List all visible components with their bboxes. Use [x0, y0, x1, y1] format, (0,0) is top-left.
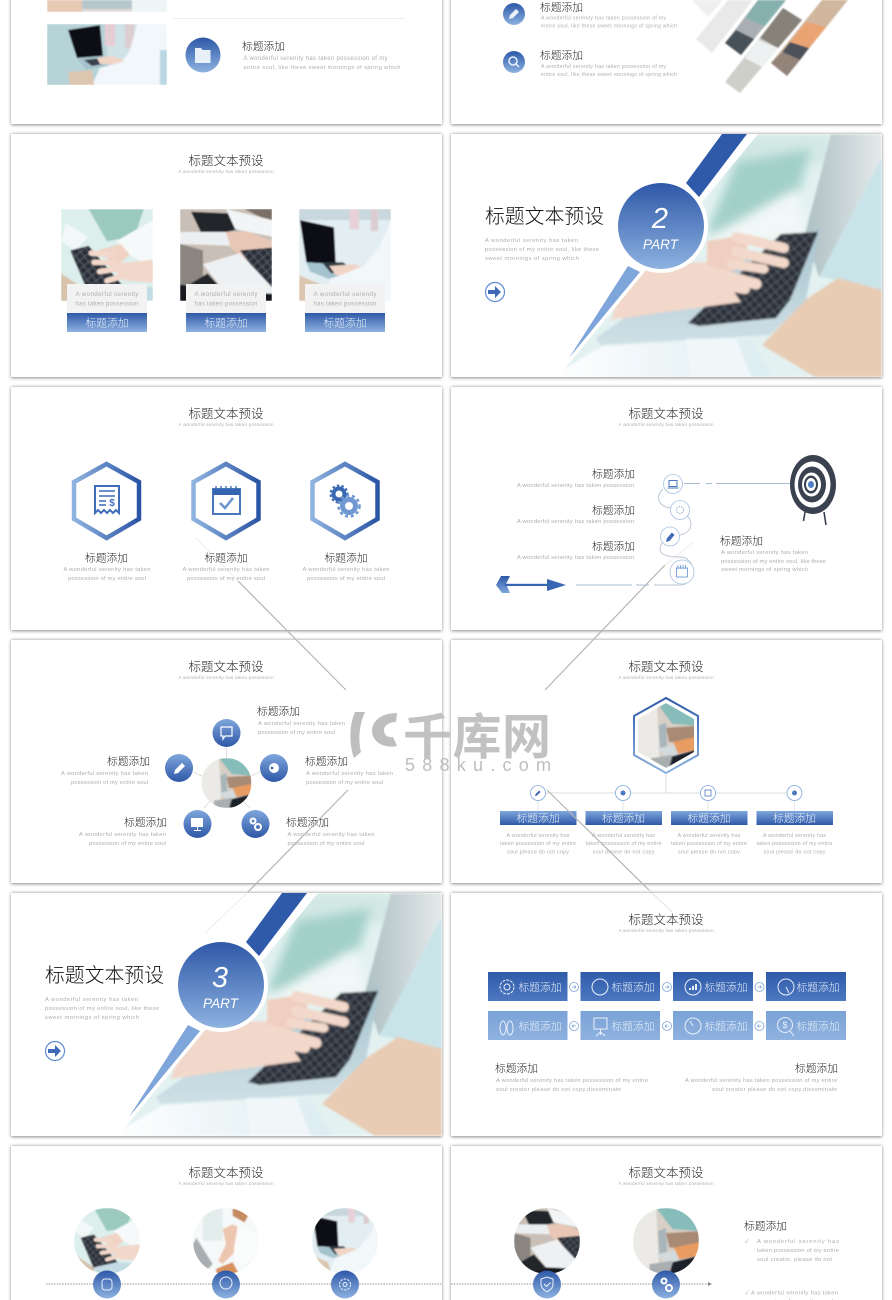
text block: A wonderful serenity has taken [45, 997, 138, 1003]
process row 2: 标题添加 [612, 1020, 654, 1033]
text block: sweet mornings of spring which [721, 567, 808, 573]
text block: possession of my entire soul [307, 576, 385, 582]
text block [45, 997, 159, 1021]
text block: soul creator please do not copy,disseminate [496, 1087, 621, 1093]
text block: A wonderful serenity has taken possession of my [541, 64, 666, 70]
process row 2: 标题添加 [704, 1020, 748, 1033]
text block: A wonderful serenity has taken [306, 771, 393, 777]
text block: A wonderful serenity has taken [288, 832, 374, 838]
text block: A wonderful serenity has taken [64, 567, 150, 573]
text block [302, 552, 390, 582]
text block: possession of my entire soul [68, 576, 146, 582]
icon: chat [212, 719, 240, 747]
watermark diagonal lines [196, 538, 694, 933]
heading: A wonderful serenity has taken possession [178, 169, 274, 174]
heading [618, 660, 714, 680]
text block: possession of my entire soul [89, 841, 166, 847]
panel: top-right slide [451, 0, 882, 124]
stripe: dark blue [246, 893, 307, 956]
badge: 2 PART: 2 [651, 203, 668, 235]
icon node 1 [93, 1270, 121, 1298]
text block: A wonderful serenity has taken [61, 771, 148, 777]
icon: gear node [670, 500, 690, 520]
column 1: 标题添加 [516, 812, 560, 825]
heading: 标题文本预设 [628, 407, 704, 421]
icon: magnifier [503, 51, 525, 73]
card 1: A wonderful serenity [76, 291, 139, 298]
text block: A wonderful serenity has taken possession of my [541, 16, 666, 22]
card 2: 标题添加 [204, 316, 248, 330]
text block: A wonderful serenity has taken [258, 721, 345, 727]
column 2: A wonderful serenity has [592, 833, 655, 839]
text block: entire soul, like these sweet mornings of spring which [541, 72, 677, 78]
icon: pencil [503, 3, 525, 25]
text block [182, 552, 270, 582]
icon node 2 [212, 1270, 240, 1298]
hexagon photo [634, 698, 698, 773]
column 4: taken possession of my entire [756, 841, 832, 847]
photo: laptop with black screen [47, 24, 167, 85]
panel: section 2 cover [451, 134, 882, 377]
text block: A wonderful serenity has taken possession [517, 483, 634, 489]
text block: sweet mornings of spring which [485, 256, 579, 262]
column 4: soul please do not copy [764, 850, 826, 856]
column 4: A wonderful serenity has [763, 833, 826, 839]
text block: 标题添加 [257, 705, 300, 718]
text block: 标题添加 [305, 755, 348, 768]
icon: book node [670, 560, 694, 584]
heading [618, 407, 714, 427]
photo: hands on laptop [11, 893, 442, 1136]
icon: pencil [165, 754, 193, 782]
text block: A wonderful serenity has taken possession [517, 519, 634, 525]
text block: A wonderful serenity has taken possession of my entire [685, 1078, 837, 1084]
text block: 标题添加 [242, 40, 285, 53]
text block: 标题添加 [324, 552, 368, 564]
heading [178, 407, 274, 427]
process row 2 [488, 1011, 846, 1040]
text block: A wonderful serenity has taken [721, 550, 808, 556]
text block: possession of my entire soul [258, 730, 335, 736]
text block [485, 238, 599, 262]
card 2: A wonderful serenity [194, 291, 258, 298]
text block [540, 49, 677, 78]
heading [178, 1166, 274, 1186]
text block: A wonderful serenity has [757, 1239, 839, 1245]
heading: A wonderful serenity has taken possession [618, 675, 714, 680]
text block [242, 40, 400, 71]
process row 2: 标题添加 [518, 1020, 562, 1033]
text block [79, 816, 167, 847]
panel: section 3 cover [11, 893, 442, 1136]
heading: 标题文本预设 [45, 965, 164, 987]
heading: 标题文本预设 [188, 154, 264, 168]
panel: timeline left [11, 1146, 442, 1300]
text block: taken possession of my entire [757, 1248, 839, 1254]
card 1: 标题添加 [86, 316, 128, 330]
card 2 [180, 209, 272, 332]
text block: soul creator, please do not [757, 1257, 832, 1263]
panel: arrow to target [451, 387, 882, 630]
text block: A wonderful serenity has taken possession of my entire [496, 1078, 648, 1084]
column 3: soul please do not copy [678, 850, 740, 856]
text block [540, 1, 677, 30]
panel: timeline right [451, 1146, 882, 1300]
icon: calendar hexagon [194, 464, 258, 538]
text block: 标题添加 [592, 504, 635, 517]
card 3: has taken possession [314, 300, 377, 308]
heading: 标题文本预设 [485, 206, 604, 228]
photo circle 4 [514, 1208, 580, 1274]
text block [495, 1062, 648, 1093]
card 3: A wonderful serenity [314, 291, 377, 298]
column 3: taken possession of my entire [671, 841, 747, 847]
icon: pencil node [660, 527, 680, 546]
badge: 2 PART [614, 179, 708, 273]
photo circle 3 [312, 1208, 378, 1274]
text block: 标题添加 [85, 552, 128, 564]
photo circle 2 [193, 1208, 259, 1274]
card 3 [299, 209, 391, 332]
heading: A wonderful serenity has taken possession [618, 422, 714, 427]
column 3: A wonderful serenity has [678, 833, 741, 839]
text block: 标题添加 [592, 468, 635, 480]
text block: 标题添加 [720, 534, 763, 548]
icon: monitor [184, 810, 212, 838]
watermark: logo: 千库网 [403, 711, 551, 765]
watermark: logo: 588ku.com [405, 755, 551, 775]
text block: 标题添加 [495, 1062, 538, 1075]
heading: 标题文本预设 [188, 407, 264, 421]
icon: arrow [486, 282, 504, 302]
stripe: light blue [569, 266, 640, 358]
icon: folder [186, 38, 220, 72]
icon: comment [260, 754, 288, 782]
text block: possession of my entire soul, like these [721, 559, 826, 565]
text block [517, 468, 635, 489]
heading: 标题文本预设 [188, 660, 264, 674]
text block: possession of my entire soul [187, 576, 265, 582]
text block [305, 755, 393, 786]
text block [286, 816, 374, 847]
text block [685, 1062, 838, 1093]
icon: receipt hexagon [74, 464, 139, 538]
column 2: soul please do not copy [592, 850, 655, 856]
process row 1: 标题添加 [518, 981, 562, 994]
heading [618, 913, 714, 933]
text block: 标题添加 [795, 1062, 838, 1075]
text block: A wonderful serenity has taken possession of my [244, 56, 388, 62]
text block: A wonderful serenity has taken [751, 1290, 838, 1296]
badge: 2 PART: PART [643, 237, 680, 252]
process row 2: $ [782, 1020, 788, 1030]
photo: cropped top [47, 0, 167, 12]
text block: 标题添加 [124, 816, 167, 829]
text block [517, 504, 635, 525]
text block: possession of my entire soul [71, 780, 148, 786]
text block: possession of my entire soul, like these [45, 1006, 159, 1012]
panel: three photo cards [11, 134, 442, 377]
icon: arrow [46, 1042, 64, 1060]
text block: ✓ [745, 1238, 749, 1245]
text block: possession of my entire soul [306, 780, 383, 786]
icon: laptop node [664, 474, 682, 494]
process row 1: 标题添加 [796, 981, 840, 994]
text block: A wonderful serenity has taken [79, 832, 166, 838]
heading: A wonderful serenity has taken possession [178, 675, 274, 680]
photo: center circle [202, 758, 252, 808]
icon node 5 [652, 1270, 680, 1298]
panel: top-left slide [11, 0, 442, 124]
panel: process grid [451, 893, 882, 1136]
icon node 3 [331, 1270, 359, 1298]
icon: target [790, 455, 836, 525]
heading [178, 660, 274, 680]
photo circle 1 [74, 1208, 140, 1274]
icon: arrow [496, 576, 566, 593]
panel: hex org chart [451, 640, 882, 883]
text block: entire soul, like these sweet mornings of spring which [541, 24, 677, 30]
card 2: has taken possession [194, 300, 258, 308]
heading: 标题文本预设 [628, 1166, 704, 1180]
text block: A wonderful serenity has taken possession [517, 555, 634, 561]
column 1: taken possession of my entire [500, 841, 576, 847]
badge: 3 PART: PART [203, 996, 240, 1011]
heading: A wonderful serenity has taken possession [178, 422, 274, 427]
text block: 标题添加 [204, 552, 248, 564]
card 1: has taken possession [76, 300, 139, 308]
text block: 标题添加 [540, 1, 583, 14]
text block: entire soul, like these sweet mornings of spring which [244, 65, 400, 71]
photo: hands on laptop [451, 134, 882, 377]
text block: A wonderful serenity has taken [182, 567, 270, 573]
badge: 3 PART: 3 [212, 962, 228, 994]
column 2 [586, 811, 662, 856]
column 1 [500, 811, 576, 856]
panel: hexagon icons [11, 387, 442, 630]
icon: gears hexagon [312, 464, 378, 538]
icon node 4 [533, 1270, 561, 1298]
process row 1: 标题添加 [704, 981, 748, 994]
text block: 标题添加 [286, 816, 329, 829]
text block: 标题添加 [592, 540, 635, 553]
watermark: logo [350, 711, 551, 775]
icon nodes [530, 786, 802, 800]
text block [517, 540, 635, 561]
text block: possession of my entire soul, like these [485, 247, 599, 253]
icon: gears [242, 810, 270, 838]
column 2: taken possession of my entire [586, 841, 662, 847]
curved path [654, 489, 693, 585]
heading: 标题文本预设 [628, 660, 704, 674]
text block [744, 1220, 839, 1300]
column 1: soul please do not copy [507, 850, 569, 856]
photo circle 5 [633, 1208, 699, 1274]
column 1: A wonderful serenity has [506, 833, 570, 839]
heading: A wonderful serenity has taken possession [178, 1181, 274, 1186]
process row 1: 标题添加 [612, 981, 654, 994]
text block: 标题添加 [107, 755, 150, 768]
connector arrows [570, 982, 764, 1030]
column 4: 标题添加 [773, 812, 816, 825]
text block: 标题添加 [744, 1220, 787, 1232]
text block: 标题添加 [540, 49, 583, 62]
column 3: 标题添加 [688, 812, 730, 825]
heading: 标题文本预设 [188, 1166, 264, 1180]
heading: A wonderful serenity has taken possession [618, 928, 714, 933]
text block: soul creator please do not copy,disseminate [712, 1087, 837, 1093]
column 2: 标题添加 [602, 812, 645, 825]
heading [178, 154, 274, 174]
heading: 标题文本预设 [628, 913, 704, 927]
column 3 [671, 811, 748, 856]
text block: sweet mornings of spring which [45, 1015, 139, 1021]
column 4 [756, 811, 833, 856]
text block: A wonderful serenity has taken [302, 567, 390, 573]
card 1 [61, 209, 153, 332]
text block [257, 705, 345, 736]
icon: receipt hexagon: $ [109, 498, 115, 509]
text block: ✓ [745, 1290, 749, 1296]
process row 1 [488, 972, 846, 1001]
heading: A wonderful serenity has taken possession [618, 1181, 714, 1186]
card 3: 标题添加 [324, 316, 366, 330]
text block: A wonderful serenity has taken [485, 238, 578, 244]
text block: possession of my entire soul [288, 841, 364, 847]
text block [720, 534, 826, 573]
process row 2: 标题添加 [796, 1020, 840, 1033]
heading [618, 1166, 714, 1186]
text block [61, 755, 150, 786]
badge: 3 PART [174, 938, 268, 1032]
stripe: dark blue [686, 134, 747, 197]
photo strips [692, 0, 848, 93]
text block [64, 552, 150, 582]
stripe: light blue [129, 1025, 200, 1117]
panel: radial diagram [11, 640, 442, 883]
